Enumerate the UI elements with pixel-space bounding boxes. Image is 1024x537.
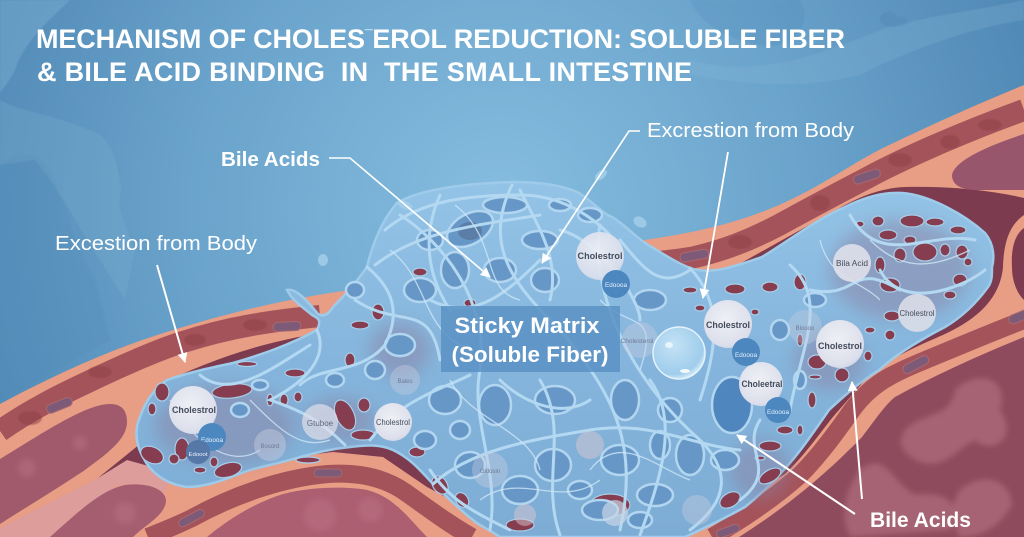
particle: cholesterol centre left (374, 403, 412, 441)
mauve tint: lobes (155, 220, 970, 500)
label box: sticky matrix (441, 306, 620, 372)
faint particles: Cholesterol (621, 338, 654, 345)
arrow: bile acids top (329, 158, 490, 277)
upper right villus (952, 134, 1024, 190)
faint particles (254, 310, 822, 526)
label box: sticky matrix: Sticky Matrix (454, 313, 600, 338)
particle: dark blue lower left: Edooot (188, 452, 208, 458)
drip droplets (318, 167, 649, 266)
label: excrestion from body: Excrestion from Body (647, 120, 854, 142)
particle: blue lower mid: Edoooa (767, 409, 789, 416)
faint particles: Bales (397, 379, 413, 385)
particle: cholesterol lower mid (739, 362, 783, 406)
wall mottling (18, 119, 1002, 425)
lower right dark band (712, 320, 1024, 537)
sticky fiber matrix (136, 167, 993, 537)
faint particles: Bloooo (796, 326, 815, 332)
upper wall dark band right (640, 110, 1024, 264)
particle: blue top centre: Edoooa (605, 282, 627, 289)
particle: blue lower left (198, 423, 226, 451)
label: bile acids top: Bile Acids (221, 149, 320, 171)
particle: cholesterol lower left: Cholestrol (172, 405, 216, 416)
label: excestion from body: Excestion from Body (55, 233, 257, 255)
particle: cholesterol top centre (576, 232, 624, 280)
fiber strands (200, 185, 985, 535)
particle: blue mid (732, 338, 760, 366)
arrow: excestion left (157, 265, 185, 362)
lower right blotches (845, 378, 1012, 537)
particle: blue lower left: Edoooa (201, 437, 223, 444)
label: bile acids bottom: Bile Acids (870, 509, 971, 532)
faint particles: Bosord (260, 444, 280, 450)
thin fiber strands (170, 205, 970, 500)
lumen dark maroon (98, 187, 1024, 537)
arrow: excretion to matrix (542, 131, 640, 263)
blue cavities (231, 197, 826, 528)
particle: cholesterol far right: Cholestrol (900, 309, 935, 318)
particle: cholesterol right (816, 320, 864, 368)
left villus one (0, 404, 127, 524)
left blotches (18, 436, 382, 531)
faint particles: Gidosin (480, 469, 500, 475)
particle: cholesterol right: Cholestrol (818, 341, 862, 352)
particle: blue mid: Edoooa (735, 352, 757, 359)
particle: cholesterol top centre: Cholestrol (578, 251, 622, 262)
right edge villus (1012, 228, 1024, 300)
cholesterol particles (169, 232, 936, 441)
bile acid blue particles (186, 270, 791, 464)
particle: bile acid far right: Bila Acid (836, 259, 868, 268)
particle: cholesterol mid: Cholestrol (706, 320, 750, 331)
particle: dark blue lower left (186, 440, 210, 464)
particle: cholesterol mid (704, 300, 752, 348)
arrow: excretion to cholesterol (703, 152, 728, 298)
arrow: bile acids bottom to lobe (852, 382, 862, 499)
title: MECHANISM OF CHOLES (36, 24, 365, 54)
particle: blue top centre (602, 270, 630, 298)
title: EROL REDUCTION: SOLUBLE FIBER (372, 24, 845, 54)
lower centre dark band (148, 474, 472, 537)
particle: blue lower mid (765, 397, 791, 423)
upper wall dark band left (0, 316, 320, 431)
lower right tissue (739, 337, 1024, 537)
arrow: bile acids bottom to matrix (737, 435, 855, 514)
wall pills (45, 168, 1024, 537)
title (36, 24, 845, 87)
particle: bile acid far right (833, 244, 871, 282)
dark inner cavity (458, 222, 482, 240)
left villus two (50, 484, 166, 537)
faint particles: Gtuboe (307, 419, 334, 428)
background: soft organic shapes (0, 0, 1024, 400)
glass bubble (653, 327, 705, 379)
particle: cholesterol centre left: Cholestrol (376, 417, 410, 427)
maroon pores (138, 215, 972, 531)
light strip (0, 460, 170, 537)
title: ¯ (364, 27, 373, 43)
title: & BILE ACID BINDING IN THE SMALL INTESTINE (37, 57, 692, 87)
particle: cholesterol far right (898, 294, 936, 332)
matrix body (136, 182, 993, 537)
particle: cholesterol lower left (169, 386, 217, 434)
particle: cholesterol lower mid: Choleetral (742, 379, 782, 390)
lower centre villus (207, 488, 427, 537)
label box: sticky matrix: (Soluble Fiber) (452, 342, 608, 367)
